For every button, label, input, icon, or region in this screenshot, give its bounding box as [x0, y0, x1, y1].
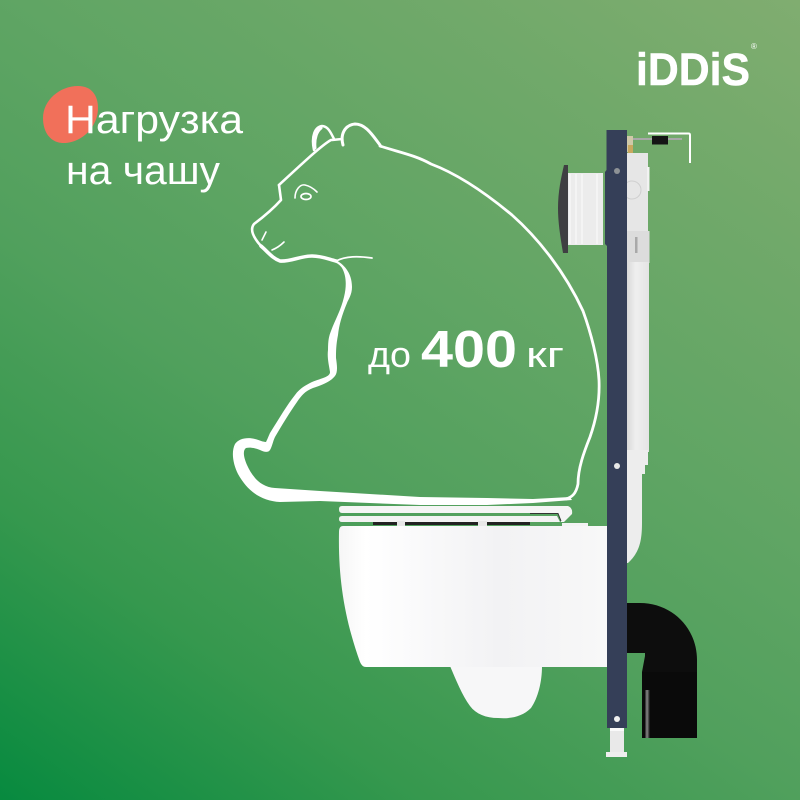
seat lower plate: [339, 516, 560, 522]
installation pipes and cistern: [623, 134, 690, 563]
seat gap: [373, 522, 530, 525]
load label: [368, 321, 564, 379]
eye: [301, 194, 311, 200]
jaw: [261, 246, 336, 261]
mouth lines: [262, 232, 284, 250]
left ear inner edge: [315, 128, 321, 148]
whisker: [336, 257, 372, 261]
navy mounting frame: [605, 130, 627, 728]
load label: до: [368, 334, 411, 375]
accent blob: [43, 86, 98, 143]
white pipe: [627, 262, 649, 452]
toilet seat: [339, 506, 588, 526]
seat upper plate: [339, 506, 572, 522]
button body: [568, 173, 603, 245]
toilet bowl: [339, 526, 607, 718]
seat buffers: [397, 521, 487, 526]
title: на чашу: [66, 149, 220, 193]
frame screw bottom: [614, 716, 620, 722]
right ear: [342, 124, 380, 145]
logo: IDDIS: ®: [751, 42, 757, 51]
seat shadow at hinge: [530, 514, 561, 521]
button cap: [558, 165, 568, 253]
back: [380, 146, 599, 499]
logo: IDDIS: iDDiS: [636, 44, 750, 95]
bear outline: [233, 124, 599, 505]
collar: [627, 231, 650, 263]
flush button: [558, 165, 603, 253]
head top and forehead: [279, 139, 342, 185]
bear thin lines: [252, 124, 599, 499]
frame screw middle: [614, 463, 620, 469]
title: Нагрузка: [65, 98, 244, 142]
load label: 400: [421, 321, 517, 379]
frame screw top: [614, 168, 620, 174]
title: [65, 98, 244, 193]
left ear: [313, 126, 334, 150]
frame foot: [606, 728, 627, 757]
chest, paw and bottom line: [233, 260, 572, 505]
wire bracket: [648, 134, 690, 163]
load label: кг: [526, 334, 564, 375]
brow: [295, 185, 317, 198]
cistern box: [627, 153, 648, 231]
black drain elbow: [627, 603, 697, 738]
